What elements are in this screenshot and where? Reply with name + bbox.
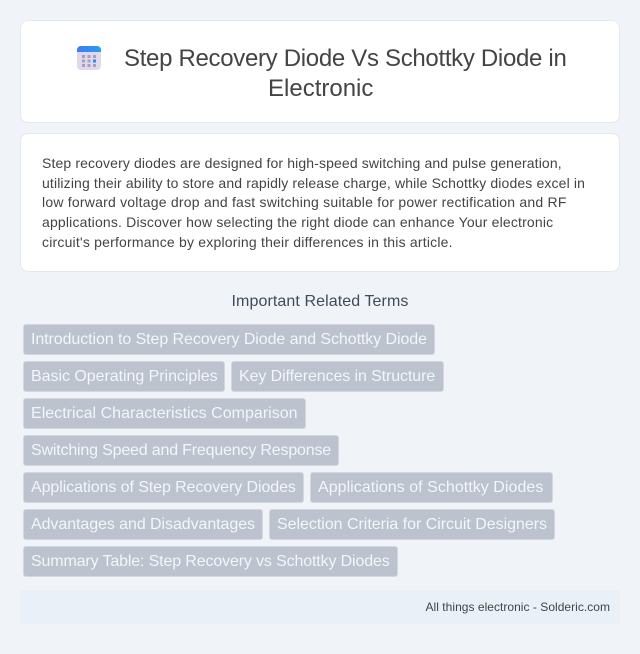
tag: Advantages and Disadvantages [31,516,255,533]
tag [310,472,553,503]
section heading: Important Related Terms [232,293,408,310]
title [124,45,566,102]
intro paragraph [42,155,585,250]
intro paragraph: utilizing their ability to store and rapidly release charge, while Schottky diodes excel in [42,175,585,191]
title: Step Recovery Diode Vs Schottky Diode in [124,45,566,72]
intro paragraph: Step recovery diodes are designed for high-speed switching and pulse generation, [42,155,562,171]
intro text card [20,133,620,272]
tag list [23,324,555,577]
tag: Electrical Characteristics Comparison [31,405,298,422]
title: Electronic [268,75,373,102]
tag: Basic Operating Principles [31,368,218,385]
tag: Introduction to Step Recovery Diode and Schottky Diode [31,331,427,348]
intro paragraph: low forward voltage drop and fast switching suitable for power rectification and RF [42,194,567,210]
tag: Applications of Step Recovery Diodes [31,479,296,496]
tag: Summary Table: Step Recovery vs Schottky Diodes [31,553,390,570]
tag: Selection Criteria for Circuit Designers [277,516,547,533]
intro paragraph: circuit's performance by exploring their differences in this article. [42,234,453,250]
tag [23,324,435,355]
tag [23,546,398,577]
footer [20,590,620,624]
tag [231,361,444,392]
tag [23,472,304,503]
header card [20,20,620,123]
tag [23,398,306,429]
tag: Switching Speed and Frequency Response [31,442,331,459]
tag [23,435,339,466]
tag [23,361,225,392]
tag: Applications of Schottky Diodes [318,479,543,496]
icon: calendar [77,46,101,70]
footer credit: All things electronic - Solderic.com [426,600,610,614]
tag [23,509,263,540]
intro paragraph: applications. Discover how selecting the right diode can enhance Your electronic [42,214,553,230]
tag [269,509,555,540]
tag: Key Differences in Structure [239,368,435,385]
